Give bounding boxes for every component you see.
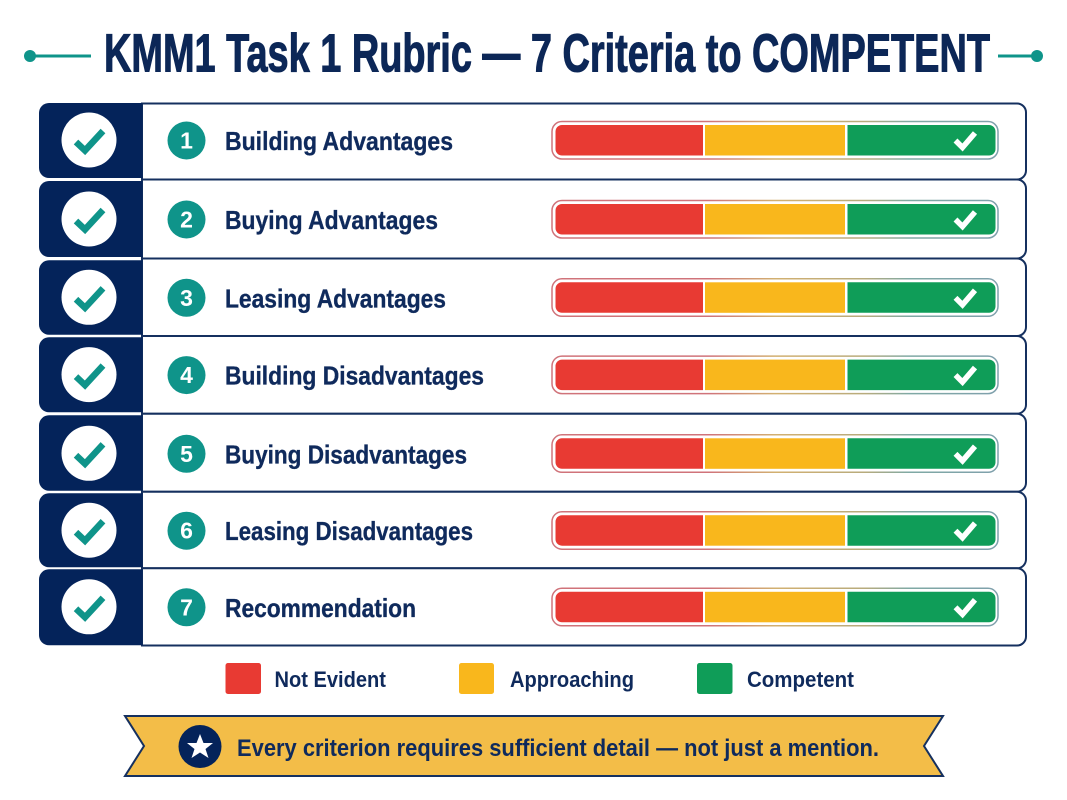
status cell [39, 103, 142, 178]
row 3: Leasing Advantages [39, 260, 998, 335]
criterion label: Building Disadvantages [225, 361, 484, 391]
number badge [168, 279, 206, 317]
rating bar [552, 122, 998, 159]
legend: competent [697, 663, 855, 694]
number badge: 3 [180, 285, 193, 311]
title left ornament [24, 50, 91, 62]
rating bar [552, 279, 998, 316]
number badge [168, 435, 206, 473]
number badge [168, 588, 206, 626]
row outlines [142, 104, 1026, 646]
callout banner [125, 716, 943, 776]
row 1: Building Advantages [39, 103, 998, 178]
legend: competent: Competent [747, 667, 855, 692]
legend [226, 663, 855, 694]
title [24, 24, 1043, 84]
rating bar [552, 512, 998, 549]
criterion label: Recommendation [225, 593, 416, 623]
ribbon shape [125, 716, 943, 776]
number badge [168, 356, 206, 394]
criterion label: Leasing Advantages [225, 283, 446, 313]
icon: star badge [178, 725, 222, 768]
criterion label: Building Advantages [225, 126, 453, 156]
rating bar [552, 200, 998, 238]
criterion label: Buying Advantages [225, 205, 438, 235]
status cell [39, 415, 142, 491]
title right ornament [998, 50, 1043, 62]
number badge: 2 [180, 206, 193, 232]
panel: criteria table [39, 103, 1026, 646]
row 7: Recommendation [39, 569, 998, 645]
callout text: Every criterion requires sufficient detail — not just a mention. [237, 735, 879, 762]
row 5: Buying Disadvantages [39, 415, 998, 491]
legend: approaching [459, 663, 634, 694]
row 4: Building Disadvantages [39, 337, 998, 412]
legend: not evident [226, 663, 387, 694]
number badge [168, 200, 206, 238]
status cell [39, 181, 142, 257]
number badge [168, 122, 206, 160]
number badge: 6 [180, 518, 193, 544]
rating bar [552, 356, 998, 394]
row 6: Leasing Disadvantages [39, 493, 998, 567]
rating bar [552, 588, 998, 626]
number badge [168, 512, 206, 550]
criterion label: Buying Disadvantages [225, 439, 467, 469]
number badge: 1 [180, 128, 193, 154]
status cell [39, 260, 142, 335]
status cell [39, 569, 142, 645]
status cell [39, 337, 142, 412]
number badge: 5 [180, 441, 193, 467]
number badge: 7 [180, 594, 193, 620]
status cell [39, 493, 142, 567]
criterion label: Leasing Disadvantages [225, 516, 473, 546]
legend: not evident: Not Evident [274, 667, 387, 692]
number badge: 4 [180, 362, 193, 388]
legend: approaching: Approaching [510, 667, 634, 692]
row 2: Buying Advantages [39, 181, 998, 257]
rating bar [552, 435, 998, 472]
